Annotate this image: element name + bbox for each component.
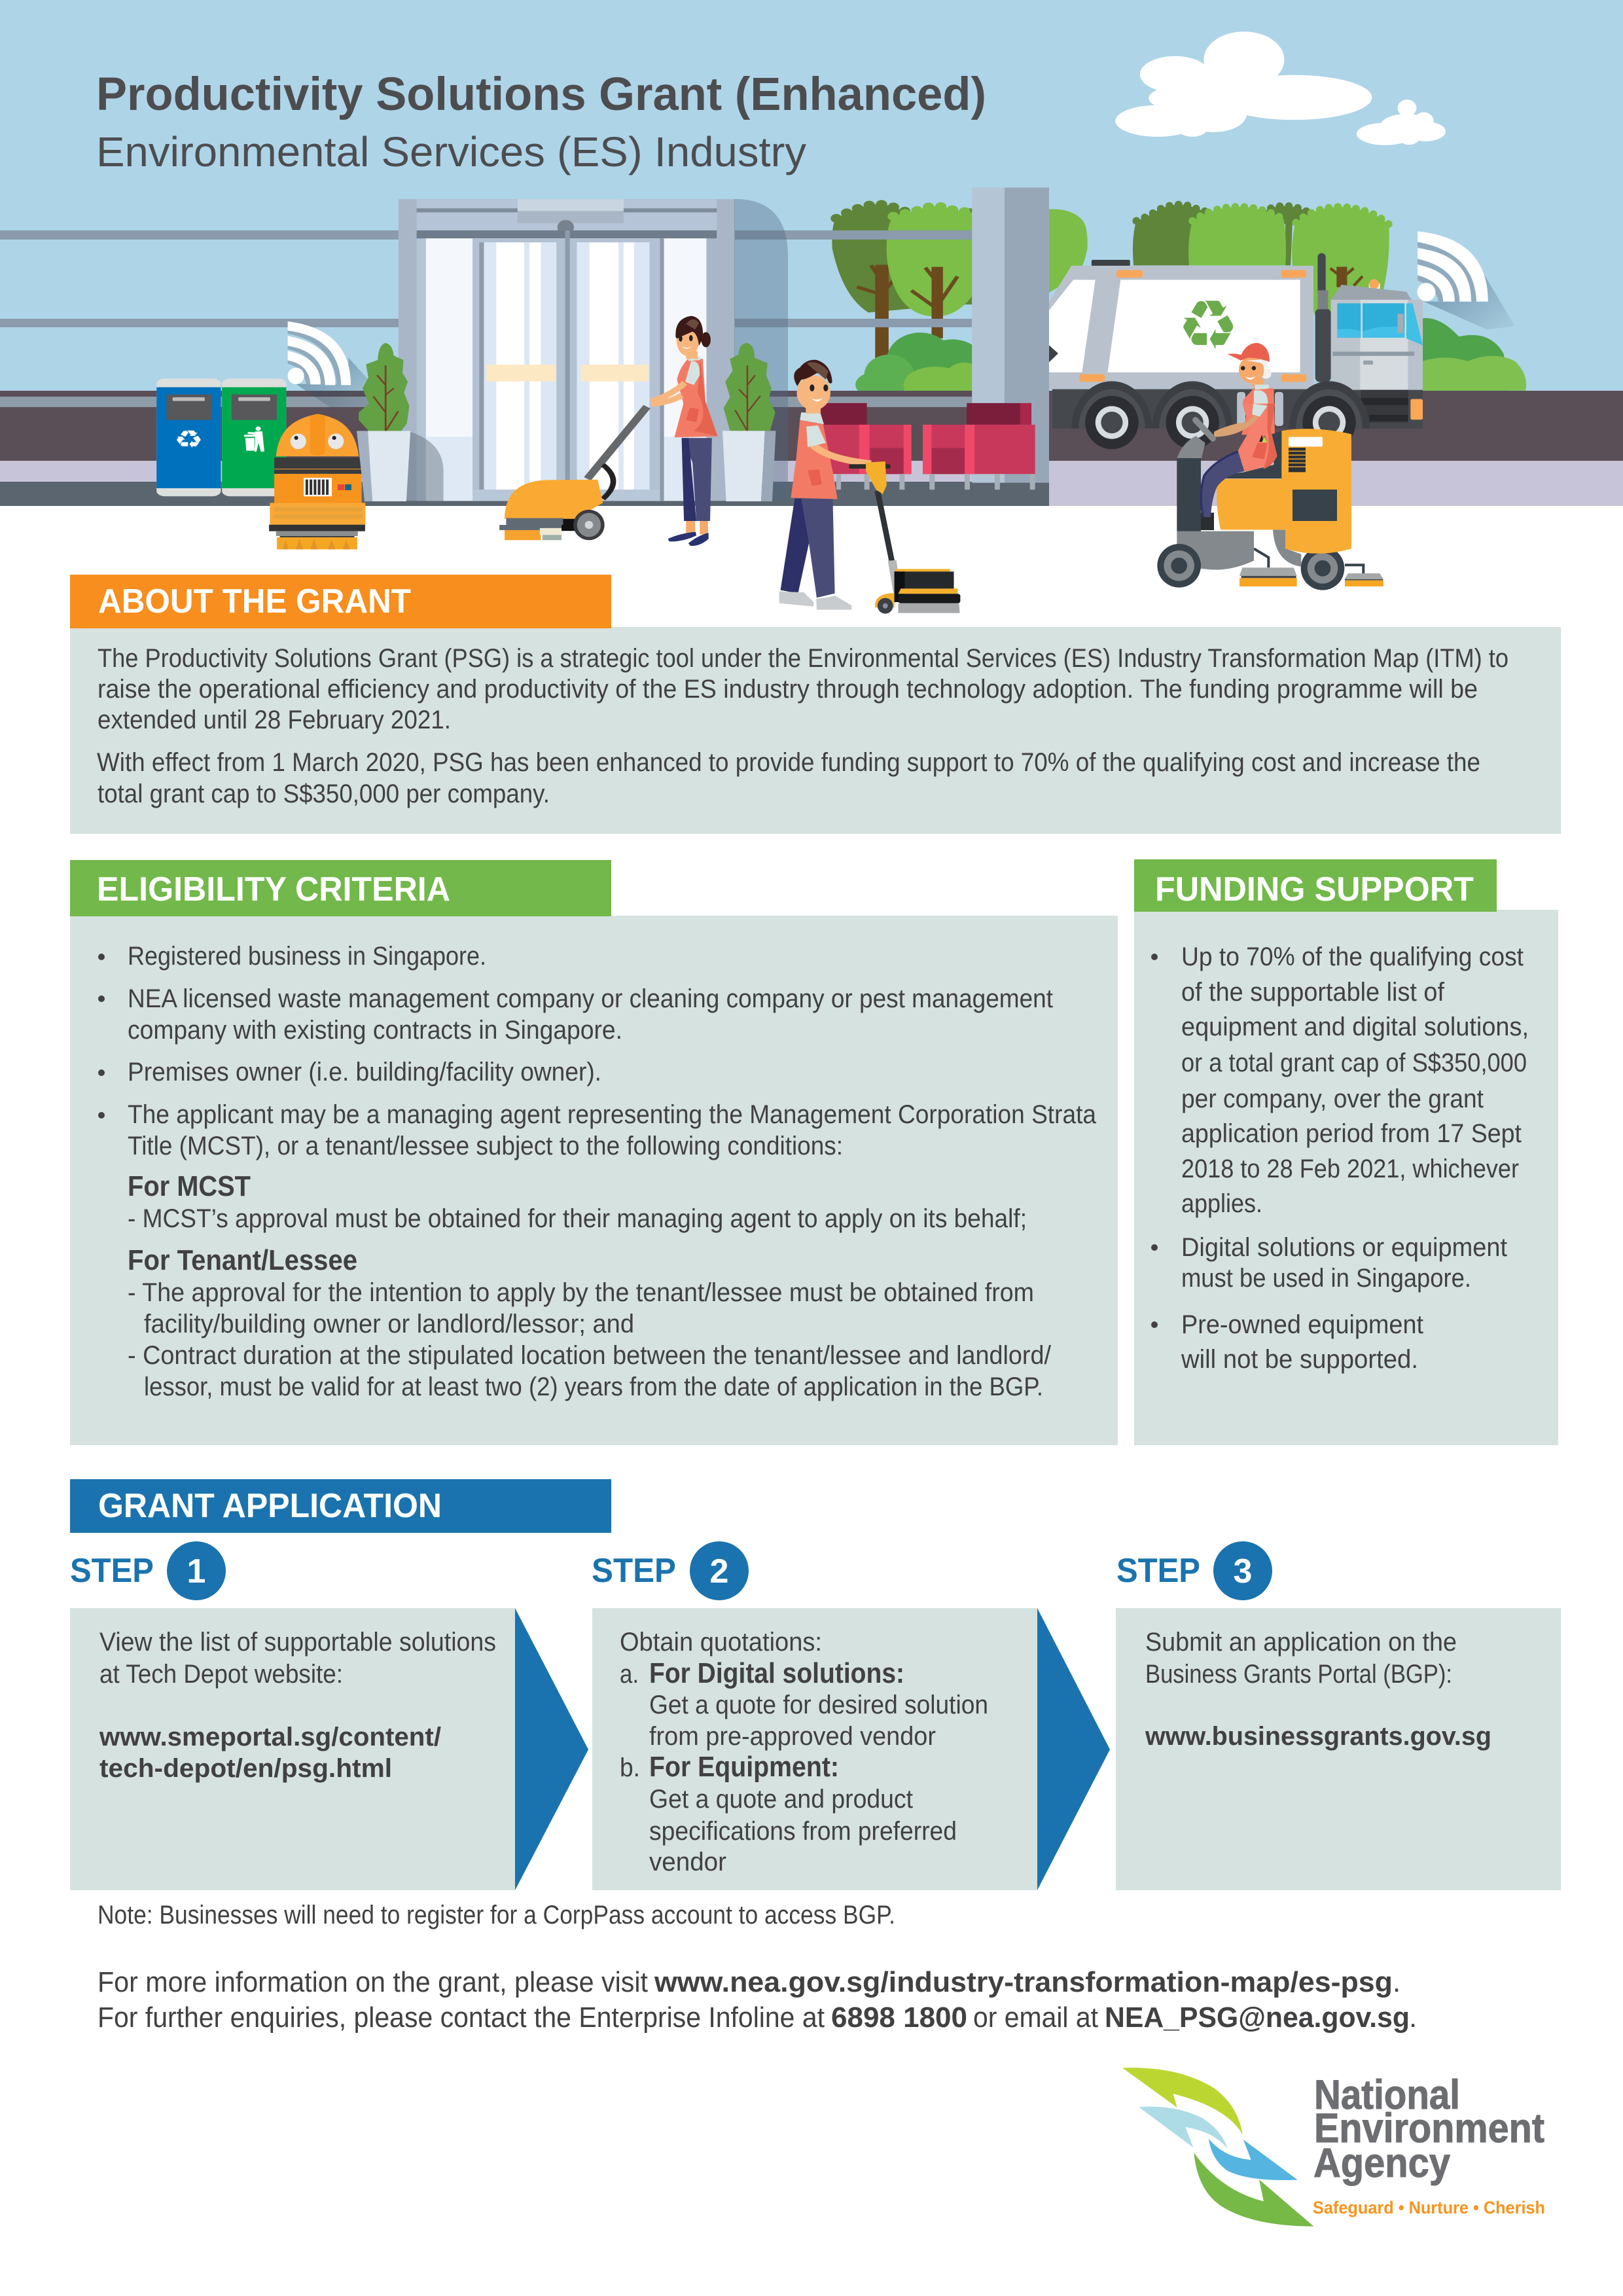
garbage truck [1049,232,1515,449]
logo wordmark [1313,2072,1544,2186]
step 1 label: 1 [187,1552,205,1590]
recycling symbol on truck: ♻ [1177,285,1239,365]
eligibility bullets: company with existing contracts in Singapore. [128,1016,622,1045]
step 2 box: Obtain quotations: [620,1628,822,1657]
pillar [972,188,1049,506]
about body text: extended until 28 February 2021. [98,706,451,734]
buffing machine [849,461,960,614]
for tenant/lessee conditions [128,1244,1052,1401]
contact information: NEA_PSG@nea.gov.sg [1105,2001,1410,2034]
step 2 label [592,1541,749,1600]
bushes left of pillar [855,332,985,403]
bushes right [1419,318,1508,391]
step 3 box: Submit an application on the [1145,1628,1457,1657]
for tenant/lessee conditions: facility/building owner or landlord/lessor; and [144,1310,634,1338]
step 3 [1116,1541,1561,1890]
floor scrubber [499,406,647,540]
plant right [722,343,776,501]
heading: about the grant: ABOUT THE GRANT [98,583,411,620]
logo: National Environment Agency [1122,2068,1545,2227]
for MCST conditions: For MCST [128,1170,251,1202]
step 1 box: www.smeportal.sg/content/ [99,1723,441,1751]
step 2 box: Get a quote and product [649,1785,913,1814]
contact information: For more information on the grant, please visit [98,1966,648,1998]
sweeper rear wheel [1301,547,1344,590]
fence rails [0,230,972,327]
step 2 box: b. [620,1753,640,1782]
contact information: www.nea.gov.sg/industry-transformation-map/es-psg [654,1966,1393,1998]
exhaust pipe [1315,253,1331,382]
central pillar and chairs [821,188,1049,506]
heading: grant application [70,1479,611,1533]
funding bullets: will not be supported. [1181,1345,1418,1374]
funding bullets: equipment and digital solutions, [1181,1013,1529,1041]
heading: funding support: FUNDING SUPPORT [1155,870,1474,908]
seated worker legs and apron [1196,404,1277,517]
hero illustration [0,0,1623,614]
pot left [357,431,444,501]
trees left of pillar [832,204,1088,357]
eligibility bullets: NEA licensed waste management company or cleaning company or pest management [128,984,1053,1013]
truck lights [1079,270,1306,382]
step 2 [592,1541,1110,1890]
step 1 label: STEP [70,1552,154,1590]
street wall [0,391,1623,506]
recycling bin blue: ♻ [174,425,204,454]
sitting worker upper body [1228,343,1283,435]
left street furniture [156,321,444,549]
contact information [98,1966,1417,2034]
logo wordmark: Agency [1313,2140,1450,2186]
panel: about the grant [70,575,1561,834]
funding bullets: applies. [1181,1189,1262,1218]
for MCST conditions [128,1170,1027,1233]
truck wheels [1071,381,1370,449]
step 2 label: 2 [710,1552,728,1590]
eligibility bullets: Premises owner (i.e. building/facility owner). [128,1058,601,1086]
logo wordmark: National [1314,2072,1460,2118]
about body text: The Productivity Solutions Grant (PSG) is a strategic tool under the Environmental Services (ES) Industry Transformation Map (ITM) to [98,644,1508,673]
funding bullets: or a total grant cap of S$350,000 [1181,1049,1527,1077]
heading: about the grant [70,575,611,628]
funding bullets: must be used in Singapore. [1181,1264,1471,1293]
eligibility bullets: Registered business in Singapore. [128,942,486,971]
truck cab [1331,279,1423,423]
for tenant/lessee conditions: lessor, must be valid for at least two (2) years from the date of application in the BGP. [144,1372,1043,1401]
step 2 box: from pre-approved vendor [649,1722,936,1751]
step 3 label: STEP [1116,1552,1200,1590]
first worker and plant [651,316,776,546]
funding bullets: of the supportable list of [1181,978,1445,1007]
step 1 box [70,1608,515,1890]
logo wordmark: Environment [1314,2106,1544,2151]
contact information: For further enquiries, please contact the Enterprise Infoline at [98,2001,825,2034]
wifi signal left [288,321,370,408]
red chairs [821,403,1035,490]
step 1 box: tech-depot/en/psg.html [99,1754,392,1783]
step 2 label: STEP [592,1552,676,1590]
step 2 box: Get a quote for desired solution [649,1691,988,1719]
about body text: total grant cap to S$350,000 per company. [98,780,550,808]
about body text: raise the operational efficiency and productivity of the ES industry through technology adoption. The funding programme will be [98,675,1478,704]
about body text [97,644,1508,808]
eligibility bullets [98,942,1097,1160]
heading: eligibility criteria: ELIGIBILITY CRITERIA [97,870,450,908]
step 2 box: a. [620,1660,639,1689]
building arch shadow [734,199,788,501]
step 2 box: For Digital solutions: [649,1657,904,1689]
logo mark [1122,2068,1313,2227]
recycling bin blue [156,378,221,496]
sweeper front wheel [1157,544,1201,588]
contact information: or email at [973,2001,1098,2034]
funding bullets [1151,942,1529,1374]
funding bullets: application period from 17 Sept [1181,1119,1522,1148]
trees and bushes behind truck [1133,205,1526,391]
about body text: With effect from 1 March 2020, PSG has been enhanced to provide funding support to 70% of the qualifying cost and increase the [97,748,1480,777]
step 1 box: at Tech Depot website: [99,1660,343,1689]
sweeper brushes [1240,567,1383,586]
step 2 box [592,1608,1037,1890]
main title: Productivity Solutions Grant (Enhanced) [96,69,986,120]
step 3 box: Business Grants Portal (BGP): [1145,1660,1452,1689]
funding bullets: Pre-owned equipment [1181,1310,1423,1339]
step 2 box: specifications from preferred [649,1817,957,1846]
plant left [357,343,444,501]
step 3 box: www.businessgrants.gov.sg [1145,1722,1491,1751]
for tenant/lessee conditions: For Tenant/Lessee [128,1244,357,1276]
step 3 box [1116,1608,1561,1890]
cleaning robot [269,414,365,549]
rubbish bin green [222,378,286,496]
funding bullets: Up to 70% of the qualifying cost [1181,942,1524,971]
second worker with buffing machine [779,360,960,614]
logo tagline: Safeguard • Nurture • Cherish [1313,2198,1545,2217]
ride-on sweeper [1157,404,1383,590]
worker with scrubber [651,316,718,546]
step 1 label [70,1541,226,1600]
funding bullets: 2018 to 28 Feb 2021, whichever [1181,1155,1519,1183]
title block [96,69,986,175]
subtitle: Environmental Services (ES) Industry [96,128,806,175]
note: Note: Businesses will need to register for a CorpPass account to access BGP. [98,1901,895,1929]
clouds [1115,31,1446,145]
eligibility bullets: Title (MCST), or a tenant/lessee subject to the following conditions: [128,1132,843,1160]
eligibility bullets: The applicant may be a managing agent representing the Management Corporation Strata [128,1100,1097,1129]
glass door entrance [399,199,735,501]
funding bullets: per company, over the grant [1181,1085,1484,1113]
heading: funding support [1134,859,1497,912]
for tenant/lessee conditions: - Contract duration at the stipulated location between the tenant/lessee and landlord/ [128,1341,1052,1370]
panel: eligibility criteria [70,860,1118,1445]
for tenant/lessee conditions: - The approval for the intention to apply by the tenant/lessee must be obtained from [128,1278,1034,1307]
arrow 2 [1037,1608,1110,1890]
contact information: . [1409,2001,1417,2034]
step 1 box: View the list of supportable solutions [99,1628,496,1657]
trees and bushes behind pillar [832,204,1088,403]
arrow 1 [515,1608,588,1890]
step 3 label [1116,1541,1272,1600]
step 3 label: 3 [1234,1552,1252,1590]
funding bullets: Digital solutions or equipment [1181,1233,1507,1262]
heading: grant application: GRANT APPLICATION [98,1487,442,1525]
wifi signal right [1418,232,1515,330]
panel: funding support [1134,859,1558,1445]
step 1 [70,1541,588,1890]
step 2 box: For Equipment: [649,1751,839,1783]
for MCST conditions: - MCST’s approval must be obtained for their managing agent to apply on its behalf; [128,1204,1027,1233]
step 2 box: vendor [649,1848,726,1876]
contact information: . [1393,1966,1400,1998]
heading: eligibility criteria [70,860,611,916]
contact information: 6898 1800 [831,2001,967,2034]
